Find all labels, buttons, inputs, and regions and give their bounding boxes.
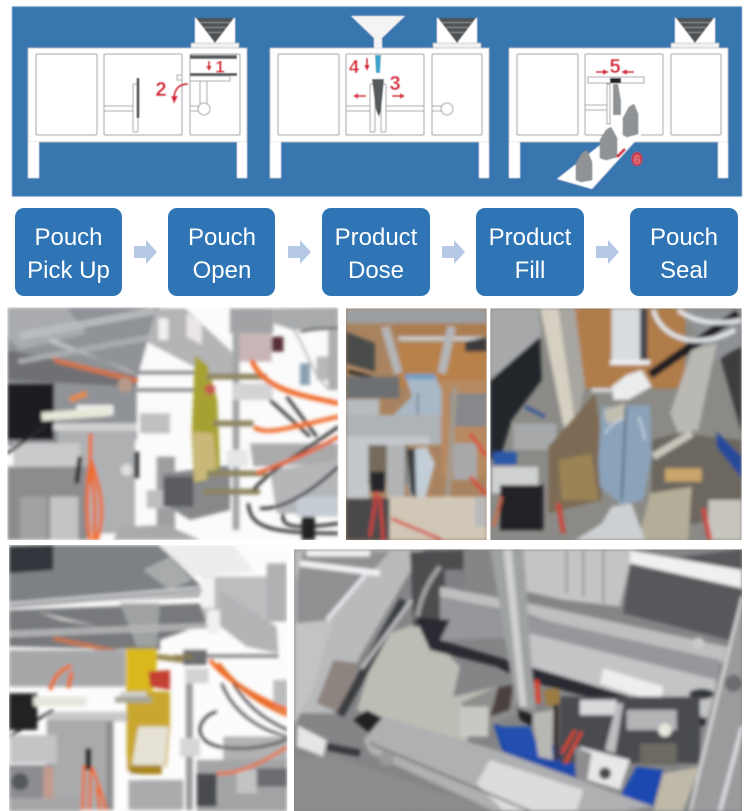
diagram: pouch pick up machine [28, 18, 247, 178]
step 4 label: 4 [349, 57, 359, 77]
step: Product Dose [322, 208, 430, 296]
arrow: to dose [288, 240, 311, 264]
step: Pouch Open: Pouch [188, 224, 256, 251]
panel: process diagram [12, 6, 742, 196]
arrow: to fill [442, 240, 465, 264]
step 1 label: 1 [215, 58, 225, 76]
arrow: to seal [596, 240, 619, 264]
conveyor pouches [576, 104, 638, 182]
photo: pouch pick up station [7, 307, 338, 540]
step: Product Dose: Product [335, 224, 418, 251]
diagram: pouch seal machine [509, 18, 728, 189]
step: Pouch Pick Up [15, 208, 122, 296]
step: Pouch Pick Up: Pick Up [27, 257, 110, 284]
photo: pouch sealing station [294, 549, 742, 811]
arrow: to open [134, 240, 157, 264]
step: Pouch Open [168, 208, 275, 296]
step 3 label: 3 [389, 73, 401, 95]
step: Product Fill: Product [489, 224, 572, 251]
step 6 label: 6 [633, 152, 641, 167]
step: Pouch Seal: Seal [660, 257, 708, 284]
step 2 label: 2 [155, 79, 167, 101]
photo: pouch at dosing funnel [9, 545, 287, 811]
step: Pouch Seal [630, 208, 738, 296]
photo: product filling station [490, 308, 742, 540]
step: Product Fill [476, 208, 584, 296]
step: Pouch Seal: Pouch [650, 224, 718, 251]
step: Pouch Open: Open [193, 257, 251, 284]
step: Pouch Pick Up: Pouch [34, 224, 103, 251]
step: Product Fill: Fill [515, 257, 545, 284]
step 6 label [632, 152, 642, 167]
photo: product dosing station [346, 308, 487, 540]
diagram: pouch open and product dose machine [270, 16, 489, 178]
step 5 label: 5 [609, 56, 621, 78]
step: Product Dose: Dose [348, 257, 404, 284]
